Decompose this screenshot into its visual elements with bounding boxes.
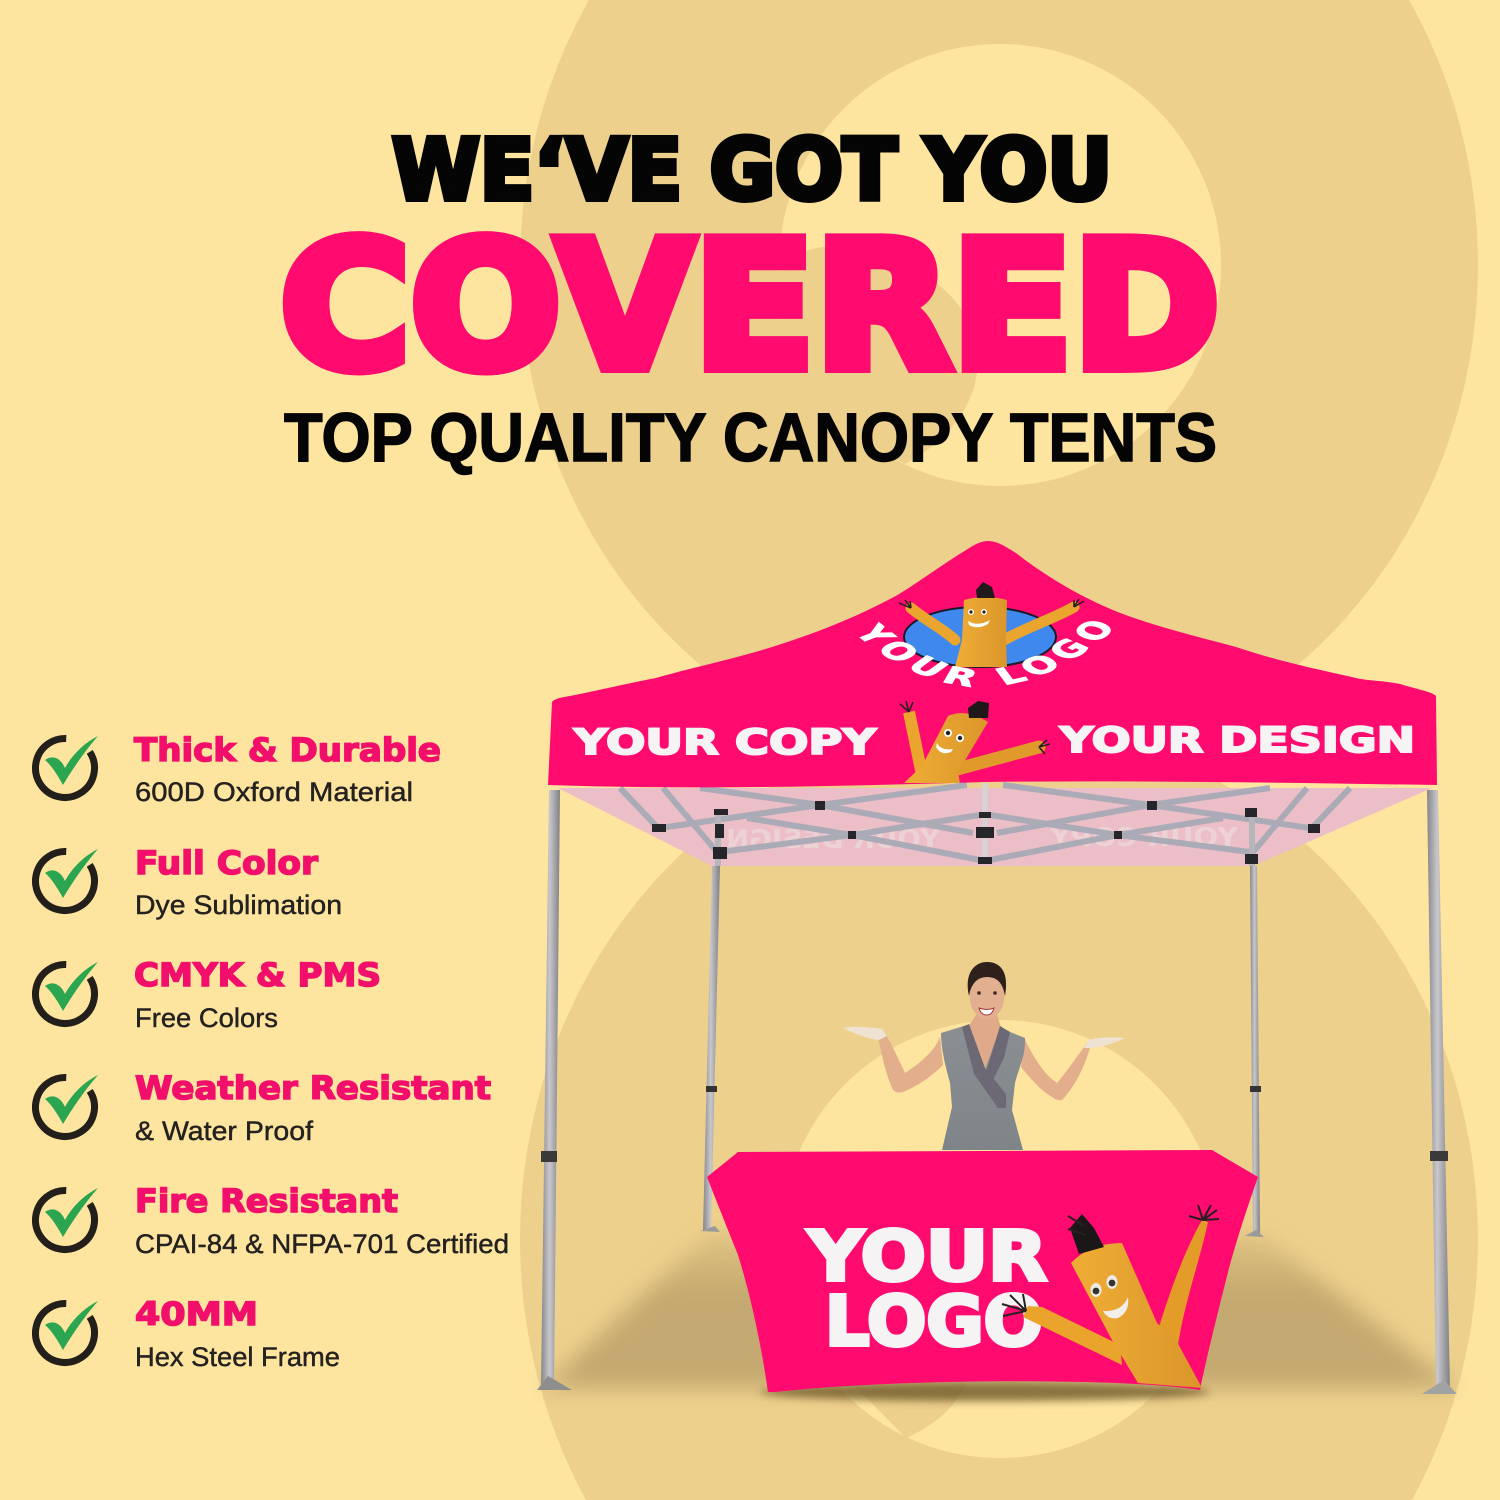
- tent back legs: [700, 866, 1264, 1237]
- feature: 40mm: 40MM: [135, 1295, 258, 1333]
- feature list: [24, 727, 509, 1374]
- feature: 40mm: [24, 1292, 340, 1374]
- floor shadow: [542, 1235, 1458, 1401]
- woman: head: [968, 962, 1006, 1019]
- woman: arms: [878, 1033, 1090, 1100]
- valance text: your design: YOUR DESIGN: [1059, 721, 1415, 761]
- feature: cmyk and pms: CMYK & PMS: [134, 956, 381, 994]
- table text: logo: LOGO: [825, 1282, 1043, 1362]
- roof logo: [859, 582, 1111, 688]
- valance text: your copy: YOUR COPY: [573, 723, 877, 763]
- feature: weather resistant: Weather Resistant: [135, 1069, 491, 1107]
- roof logo: your logo curved text: YOUR LOGO: [859, 621, 1111, 688]
- title line: we've got you: WE‘VE GOT YOU: [392, 121, 1112, 219]
- feature: thick and durable: Thick & Durable: [134, 731, 441, 769]
- roof logo: mascot: [899, 582, 1084, 667]
- canopy frame: [620, 783, 1350, 866]
- ghost print seen through canopy: [726, 823, 1239, 855]
- tent front legs: [537, 790, 1457, 1394]
- feature: fire resistant: [24, 1179, 509, 1261]
- feature: full color: [24, 840, 342, 922]
- ghost print seen through canopy: YOUR DESIGN: [726, 825, 941, 855]
- table mascot: [1002, 1205, 1219, 1388]
- feature: fire resistant: CPAI-84 & NFPA-701 Certified: [135, 1229, 509, 1259]
- feature: full color: Dye Sublimation: [135, 890, 342, 920]
- woman: collar: [962, 1024, 1010, 1108]
- woman: hands: [843, 1027, 1125, 1048]
- valance mascot: [900, 701, 1050, 783]
- feature: thick and durable: [24, 727, 441, 809]
- canopy top: [548, 541, 1437, 787]
- feature: thick and durable: 600D Oxford Material: [135, 777, 413, 807]
- ghost print seen through canopy: YOUR COPY: [1049, 823, 1239, 853]
- feature: cmyk and pms: Free Colors: [135, 1003, 278, 1033]
- feature: full color: Full Color: [135, 844, 318, 882]
- woman: dress: [941, 1025, 1025, 1150]
- woman: neck and chest: [966, 1012, 1002, 1075]
- feature: cmyk and pms: [24, 953, 381, 1035]
- feature: fire resistant: Fire Resistant: [135, 1182, 398, 1220]
- canopy underside: [558, 788, 1432, 866]
- background figure eight: [520, 0, 1478, 1500]
- table cover: [707, 1150, 1258, 1392]
- table text: your: YOUR: [807, 1217, 1047, 1297]
- feature: weather resistant: [24, 1066, 491, 1148]
- feature: 40mm: Hex Steel Frame: [135, 1342, 340, 1372]
- feature: weather resistant: & Water Proof: [135, 1116, 314, 1146]
- woman: [843, 962, 1125, 1150]
- title line: covered: COVERED: [280, 206, 1220, 409]
- subtitle: top quality canopy tents: TOP QUALITY CANOPY TENTS: [284, 399, 1217, 476]
